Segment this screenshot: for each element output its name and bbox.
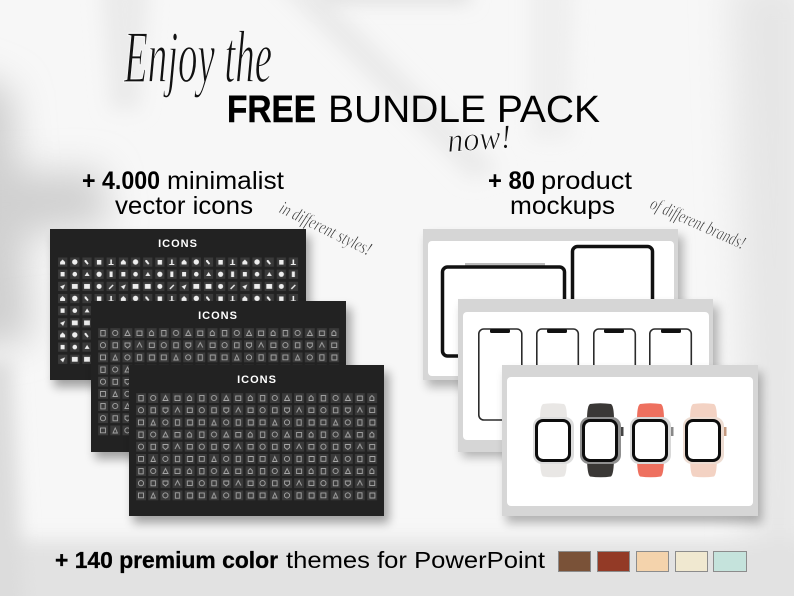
panel: phone mockups sheet — [458, 299, 718, 457]
icon: white watch — [533, 403, 574, 477]
icon: coral watch — [630, 403, 674, 477]
panel: icon sheet 1: ICONS — [158, 238, 198, 250]
icon: pink watch — [683, 403, 726, 477]
color swatches — [558, 552, 746, 572]
title: FREE BUNDLE PACK: FREE — [227, 89, 316, 131]
heading: 4.000 minimalist vector icons — [82, 167, 284, 220]
panel: icon sheet 1 — [50, 229, 310, 387]
panel: icon sheet 3 — [129, 365, 389, 523]
heading: 80 product mockups: + 80 — [488, 167, 535, 195]
caption: premium color themes: + 140 premium color — [55, 547, 278, 573]
caption: premium color themes: themes for PowerPoint — [286, 547, 546, 573]
icon: phone 4 — [650, 329, 691, 420]
icon: portrait tablet — [572, 246, 652, 316]
script note: of different brands: of different brands! — [647, 193, 749, 254]
panel: tablet mockups sheet — [423, 229, 683, 387]
icon: black watch — [580, 403, 624, 477]
panel: icon sheet 3: ICONS — [237, 374, 277, 386]
heading: 80 product mockups — [488, 167, 632, 220]
title: FREE BUNDLE PACK: BUNDLE PACK — [328, 89, 600, 131]
panel: icon sheet 2: ICONS — [198, 310, 238, 322]
script note: in different styles: in different styles! — [276, 198, 375, 260]
heading: 4.000 minimalist vector icons: + 4.000 — [82, 167, 160, 195]
heading: 80 product mockups: product — [541, 167, 632, 195]
script heading: Enjoy the: Enjoy the — [123, 17, 272, 99]
icon: phone 1 — [479, 329, 522, 420]
caption: premium color themes — [55, 547, 546, 573]
icon: landscape tablet — [442, 263, 564, 356]
heading: 4.000 minimalist vector icons: vector icons — [115, 192, 253, 220]
panel: watch mockups sheet — [502, 365, 762, 523]
icon: phone 3 — [594, 329, 635, 420]
heading: 4.000 minimalist vector icons: minimalist — [167, 167, 284, 195]
script note: now!: now! — [446, 119, 512, 160]
heading: 80 product mockups: mockups — [510, 192, 615, 220]
icon: phone 2 — [537, 329, 578, 420]
panel: icon sheet 2 — [91, 301, 351, 459]
